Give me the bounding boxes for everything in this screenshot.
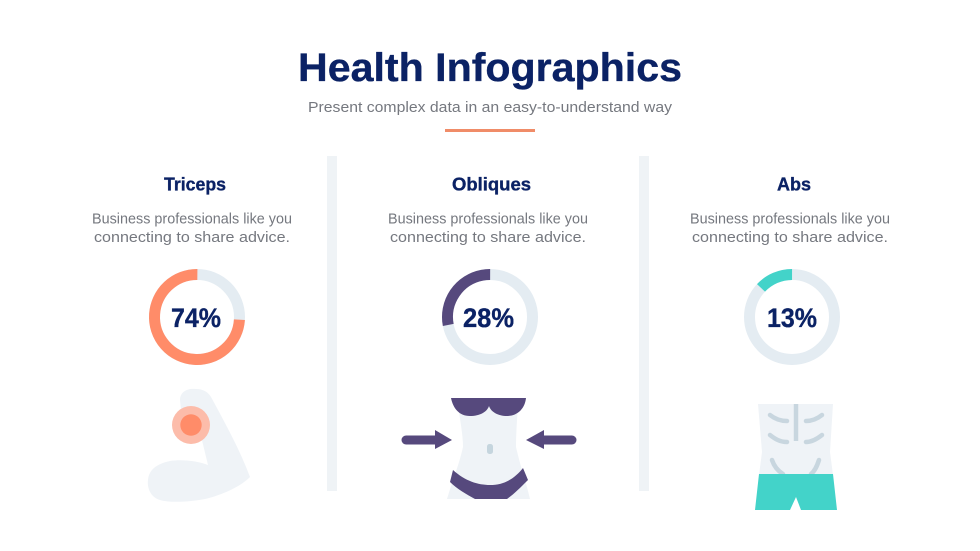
icon: abs torso with shorts	[755, 404, 837, 510]
donut chart: 28%	[440, 267, 540, 367]
text block: triceps: Business professionals like you	[92, 212, 292, 228]
donut chart: 13%: 13%	[767, 303, 817, 333]
panel: triceps	[92, 174, 292, 502]
panel: obliques	[388, 174, 588, 499]
text block: obliques	[388, 212, 588, 246]
heading: abs: Abs	[777, 174, 811, 194]
icon: flexed arm	[148, 389, 250, 502]
title underline	[445, 129, 535, 132]
heading: triceps: Triceps	[164, 174, 226, 194]
title: Health Infographics	[298, 46, 682, 90]
text block: abs: connecting to share advice.	[692, 230, 888, 246]
panel: abs	[690, 174, 890, 510]
text block: obliques: Business professionals like you	[388, 212, 588, 228]
donut chart: 74%	[152, 272, 242, 362]
text block: triceps	[92, 212, 292, 246]
donut chart: 13%	[732, 257, 852, 377]
icon: waist with arrows	[406, 398, 572, 499]
text block: abs	[690, 212, 890, 246]
donut chart: 74%: 74%	[171, 303, 221, 333]
subtitle: Present complex data in an easy-to-understand way	[308, 99, 673, 116]
header	[298, 46, 682, 132]
text block: abs: Business professionals like you	[690, 212, 890, 228]
text block: obliques: connecting to share advice.	[390, 230, 586, 246]
heading: obliques: Obliques	[452, 174, 531, 194]
donut chart: 28%: 28%	[463, 303, 514, 333]
text block: triceps: connecting to share advice.	[94, 230, 290, 246]
